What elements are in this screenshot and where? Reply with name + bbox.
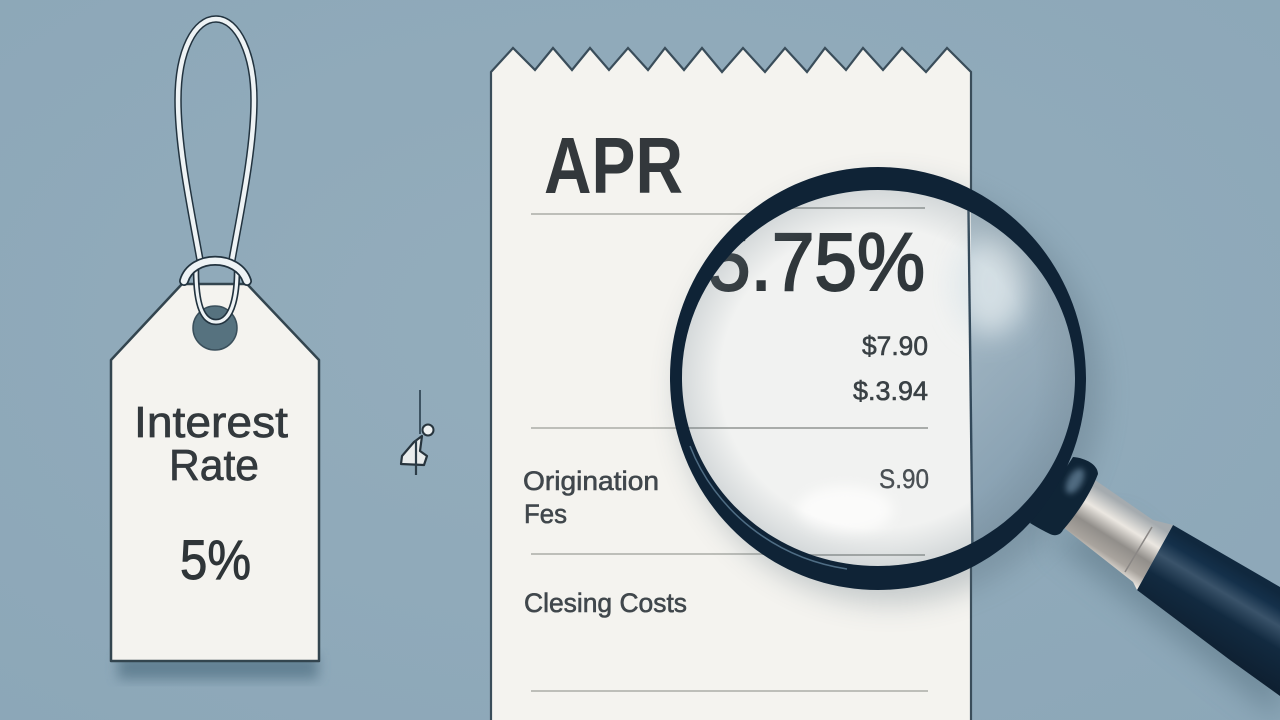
glass over receipt: [670, 180, 971, 580]
tag label: Interest: [134, 398, 288, 447]
magnifying glass: [670, 167, 1280, 720]
lens edge shading: [681, 190, 1075, 566]
lens: S.90: [879, 464, 929, 494]
string loop: [178, 19, 254, 322]
handle: [1030, 457, 1280, 696]
row divider lines: [531, 214, 928, 691]
magnifier shadow: [678, 180, 1102, 604]
lens divider lines: [680, 208, 928, 555]
receipt heading: APR: [544, 121, 683, 210]
lens rim: [670, 167, 1086, 590]
collar: [1030, 457, 1098, 535]
dark grip: [1137, 525, 1280, 696]
price tag with loop: Rate: [169, 441, 259, 490]
magnified APR value: 5.75%: [708, 217, 925, 308]
receipt edge in lens: [968, 170, 973, 590]
receipt: [491, 48, 971, 720]
closing costs label: Clesing Costs: [524, 588, 687, 618]
icon: small scale glyph: [401, 390, 434, 475]
silver ferrule: [1063, 480, 1173, 590]
receipt body: [491, 48, 971, 720]
origination fee label: Origination: [523, 466, 659, 496]
magnified amounts: $7.90: [862, 331, 928, 361]
tag hole: [193, 306, 237, 350]
glass over background: [870, 212, 1075, 566]
lens: $.3.94: [853, 376, 928, 406]
receipt: Fes: [524, 499, 567, 529]
tag shadow: [118, 655, 318, 679]
lens: [686, 192, 1075, 566]
tag value: 5%: [180, 528, 251, 591]
price tag with loop: [111, 19, 319, 679]
rim highlight: [690, 446, 847, 569]
tag body: [111, 284, 319, 661]
